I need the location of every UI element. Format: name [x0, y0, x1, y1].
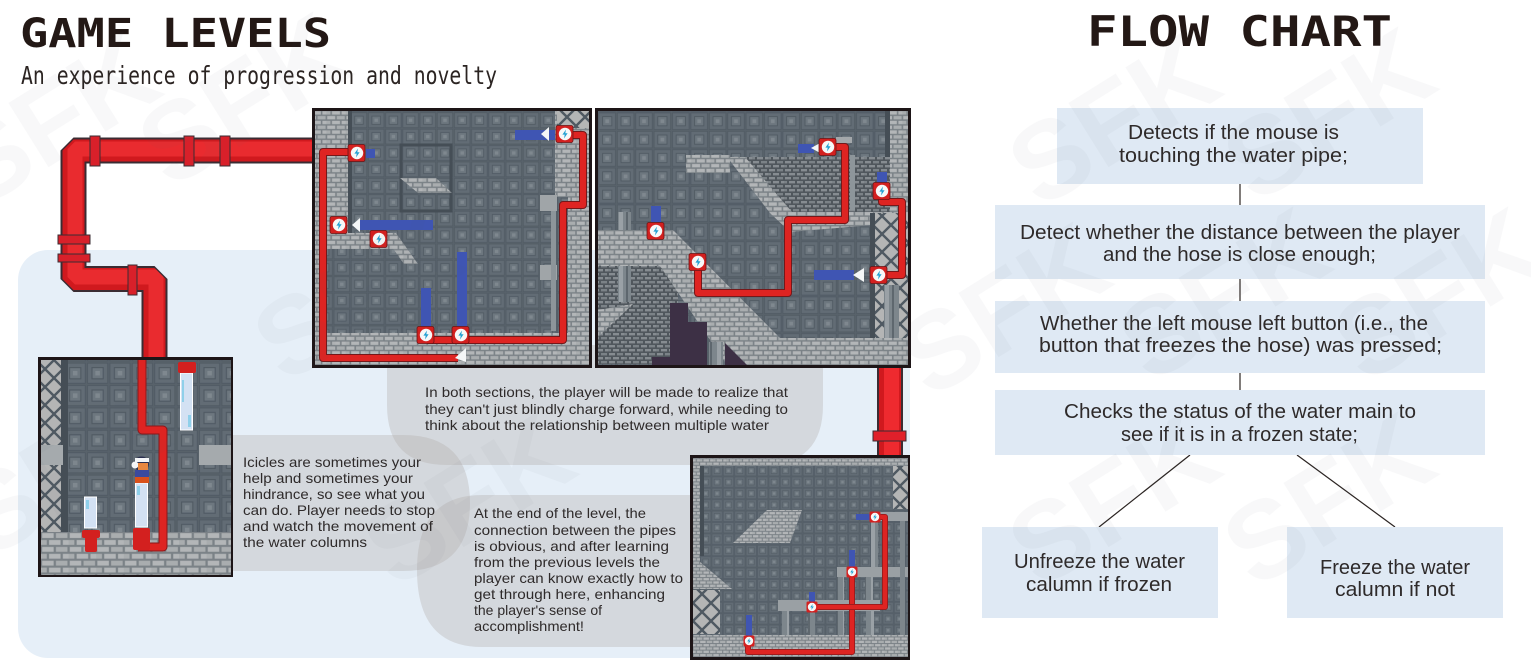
- flow outcome: freeze: [1287, 527, 1503, 618]
- text block: both sections: In both sections, the player will be made to realize that: [425, 384, 788, 400]
- panel: level two screenshot: [595, 108, 911, 368]
- watermark: repeated SFK marks: SFK: [1098, 184, 1349, 405]
- icon: big red pipe from first level to third level: [58, 136, 312, 357]
- subheading: progression and novelty: An experience of progression and novelty: [21, 61, 497, 90]
- flow outcome: freeze: Freeze the water: [1320, 556, 1470, 579]
- text block: both sections: [425, 384, 788, 433]
- watermark: repeated SFK marks: SFK: [233, 184, 484, 405]
- watermark: repeated SFK marks: SFK: [988, 9, 1239, 230]
- callout bubble: end of the level: [417, 495, 700, 647]
- text block: icicles: hindrance, so see what you: [243, 486, 425, 502]
- callout bubble: both sections: [387, 345, 823, 465]
- flow step: water main status: Checks the status of the water main to: [1064, 400, 1416, 423]
- text block: both sections: they can't just blindly charge forward, while needing to: [425, 401, 788, 417]
- icicle cracks: [86, 380, 191, 509]
- panel: level three screenshot with icicles: [38, 357, 233, 577]
- pipes: [138, 360, 163, 547]
- flow step: water main status: see if it is in a frozen state;: [1121, 423, 1358, 446]
- flow step: left button pressed: Whether the left mouse left button (i.e., the: [1040, 312, 1428, 335]
- text block: end of the level: [474, 505, 683, 634]
- water jets: [360, 130, 555, 330]
- text block: icicles: help and sometimes your: [243, 470, 413, 486]
- icon: big red pipe to fourth level: [873, 367, 906, 457]
- text block: end of the level: from the previous levels the: [474, 554, 660, 570]
- flow step: player distance: Detect whether the distance between the player: [1020, 221, 1460, 244]
- flow outcome: unfreeze: [982, 527, 1218, 618]
- flow outcome: unfreeze: Unfreeze the water: [1014, 550, 1185, 573]
- flow step: mouse touching pipe: Detects if the mouse is: [1128, 121, 1339, 144]
- flow step: water main status: [995, 390, 1485, 455]
- flow step: mouse touching pipe: touching the water pipe;: [1119, 144, 1348, 167]
- flow step: player distance: and the hose is close enough;: [1103, 243, 1376, 266]
- text block: both sections: think about the relationship between multiple water: [425, 417, 769, 433]
- flow step: mouse touching pipe: [1057, 108, 1423, 184]
- caps: [82, 362, 196, 552]
- flow step: player distance: [995, 205, 1485, 279]
- panel: level one screenshot: [312, 108, 592, 368]
- watermark: repeated SFK marks: SFK: [878, 199, 1129, 420]
- text block: end of the level: the player's sense of: [474, 602, 602, 618]
- flow outcome: freeze: calumn if not: [1335, 578, 1455, 601]
- text block: end of the level: is obvious, and after learning: [474, 538, 669, 554]
- pipes: [323, 135, 583, 358]
- callout bubble: icicles: [233, 435, 470, 571]
- flow step: left button pressed: button that freezes the hose) was pressed;: [1039, 334, 1442, 357]
- water jets: [746, 514, 870, 637]
- watermark: repeated SFK marks: SFK: [343, 389, 594, 610]
- text block: end of the level: accomplishment!: [474, 618, 584, 634]
- panel: blue background: [18, 250, 910, 658]
- heading: flow chart: FLOW CHART: [1087, 7, 1392, 56]
- text block: icicles: can do. Player needs to stop: [243, 502, 435, 518]
- icicles: [84, 373, 192, 528]
- watermark: repeated SFK marks: SFK: [988, 389, 1239, 610]
- text block: end of the level: player can know exactly how to: [474, 570, 683, 586]
- heading: game levels: GAME LEVELS: [20, 11, 331, 57]
- text block: end of the level: At the end of the level, the: [474, 505, 646, 521]
- flow outcome: unfreeze: calumn if frozen: [1026, 573, 1172, 596]
- icon: player character: [132, 456, 149, 483]
- watermark: repeated SFK marks: SFK: [1203, 389, 1454, 610]
- flow step: left button pressed: [995, 301, 1485, 373]
- pipes: [748, 517, 885, 652]
- text block: icicles: [243, 454, 435, 550]
- water jets: [651, 144, 887, 280]
- text block: icicles: the water columns: [243, 534, 367, 550]
- text block: icicles: and watch the movement of: [243, 518, 433, 534]
- pipes: [698, 147, 902, 293]
- watermark: repeated SFK marks: SFK: [1203, 4, 1454, 225]
- panel: level four screenshot: [690, 455, 910, 660]
- text block: end of the level: get through here, enhancing: [474, 586, 665, 602]
- text block: icicles: Icicles are sometimes your: [243, 454, 421, 470]
- text block: end of the level: connection between the pipes: [474, 522, 676, 538]
- flow connector lines: [1099, 184, 1395, 527]
